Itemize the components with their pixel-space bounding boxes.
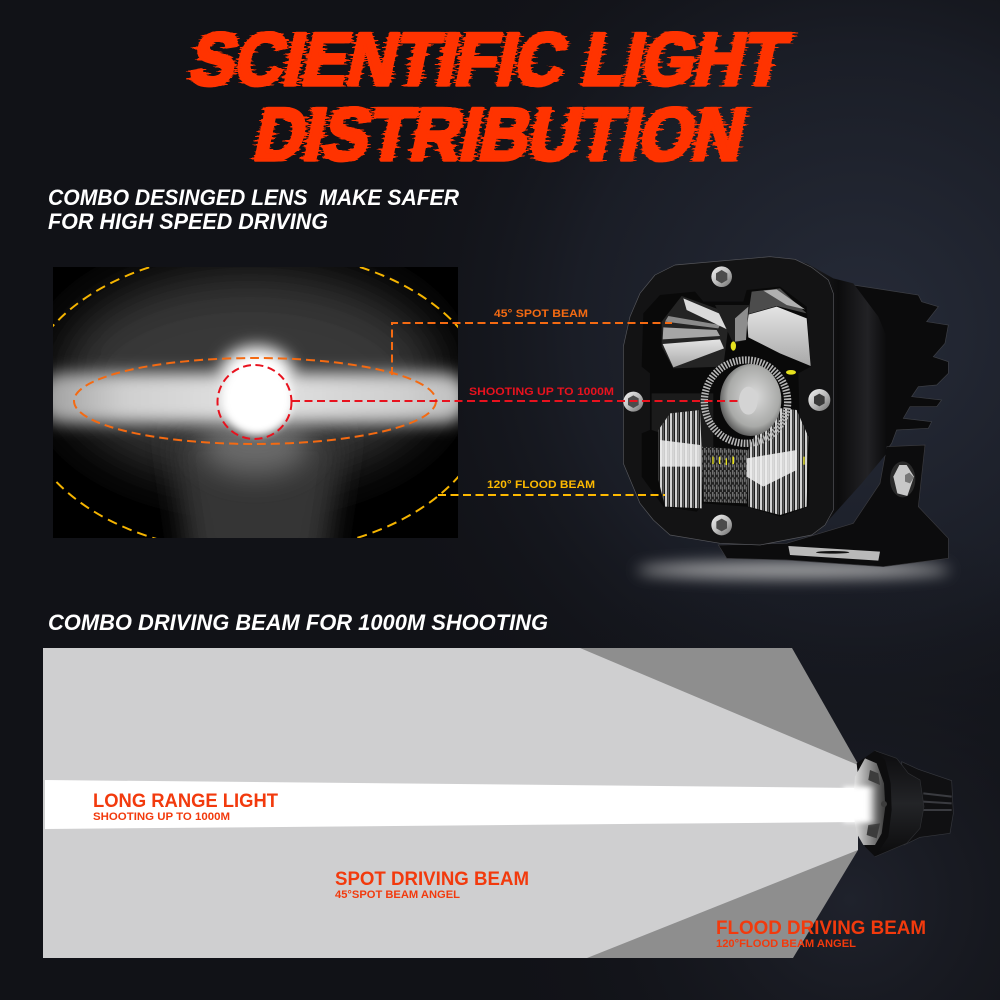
side bolt [890, 461, 915, 497]
heading: combo designed lens: COMBO DESINGED LENS MAKE SAFER [48, 185, 459, 210]
floor glow [637, 561, 950, 579]
heading: combo designed lens: FOR HIGH SPEED DRIVING [48, 209, 328, 234]
long range label: LONG RANGE LIGHT [93, 791, 278, 812]
flood callout line [438, 494, 665, 496]
top right reflector [715, 288, 811, 366]
long range label [93, 791, 278, 823]
yellow LEDs [712, 341, 805, 465]
beam labels [93, 791, 926, 950]
title line 2: DISTRIBUTION [247, 93, 753, 177]
screw top [711, 266, 732, 287]
spot label: SPOT DRIVING BEAM [335, 869, 529, 890]
ambient flood haze [53, 267, 458, 538]
lamp body [760, 257, 887, 545]
long range beam [45, 780, 860, 829]
flood reflector right [747, 407, 808, 515]
beam glow [843, 787, 877, 823]
flood ellipse [53, 267, 458, 538]
top left reflector [662, 296, 730, 368]
heading: combo driving beam: COMBO DRIVING BEAM FOR 1000M SHOOTING [48, 610, 548, 635]
spot ellipse [74, 358, 436, 444]
center circle [218, 365, 292, 439]
main lamp [623, 257, 950, 579]
reflector detail [867, 770, 887, 838]
callout lines [292, 323, 740, 495]
flood label: FLOOD DRIVING BEAM [716, 918, 926, 939]
dark fans above flood [652, 393, 713, 450]
front bezel [857, 751, 892, 857]
callout labels: 120° FLOOD BEAM [487, 479, 595, 491]
panel: beam pattern photo [53, 267, 458, 538]
projector ring [704, 360, 788, 443]
flood label [716, 918, 926, 950]
spot label [335, 869, 529, 901]
screw bottom [711, 515, 732, 535]
flood label: 120°FLOOD BEAM ANGEL [716, 938, 856, 950]
center highlight [660, 440, 700, 467]
spot beam area [43, 648, 858, 958]
callout labels: 45° SPOT BEAM [494, 308, 588, 320]
bracket [718, 445, 948, 567]
flood beam area [43, 648, 858, 958]
front face [853, 758, 885, 845]
fins [902, 762, 953, 845]
front bezel [623, 257, 833, 545]
callout labels: SHOOTING UP TO 1000M [469, 386, 614, 398]
spot label: 45°SPOT BEAM ANGEL [335, 889, 460, 901]
screw right [808, 389, 830, 411]
long range label: SHOOTING UP TO 1000M [93, 811, 230, 823]
lens window [642, 287, 811, 517]
beam outlines [53, 267, 458, 538]
panel: beam diagram [43, 648, 860, 958]
cooling fins [853, 285, 948, 450]
flood reflector left [658, 410, 702, 508]
spot callout line [392, 323, 672, 375]
title line 1: SCIENTIFIC LIGHT [183, 18, 795, 102]
flood reflector center [702, 447, 748, 503]
body [875, 751, 924, 857]
bracket plate [788, 546, 880, 561]
heading: combo designed lens [48, 185, 459, 234]
screw left [623, 392, 643, 412]
shooting callout line [292, 400, 740, 402]
small lamp [843, 751, 953, 857]
callout labels [469, 308, 614, 491]
projector lens [720, 364, 781, 436]
title [183, 18, 795, 177]
